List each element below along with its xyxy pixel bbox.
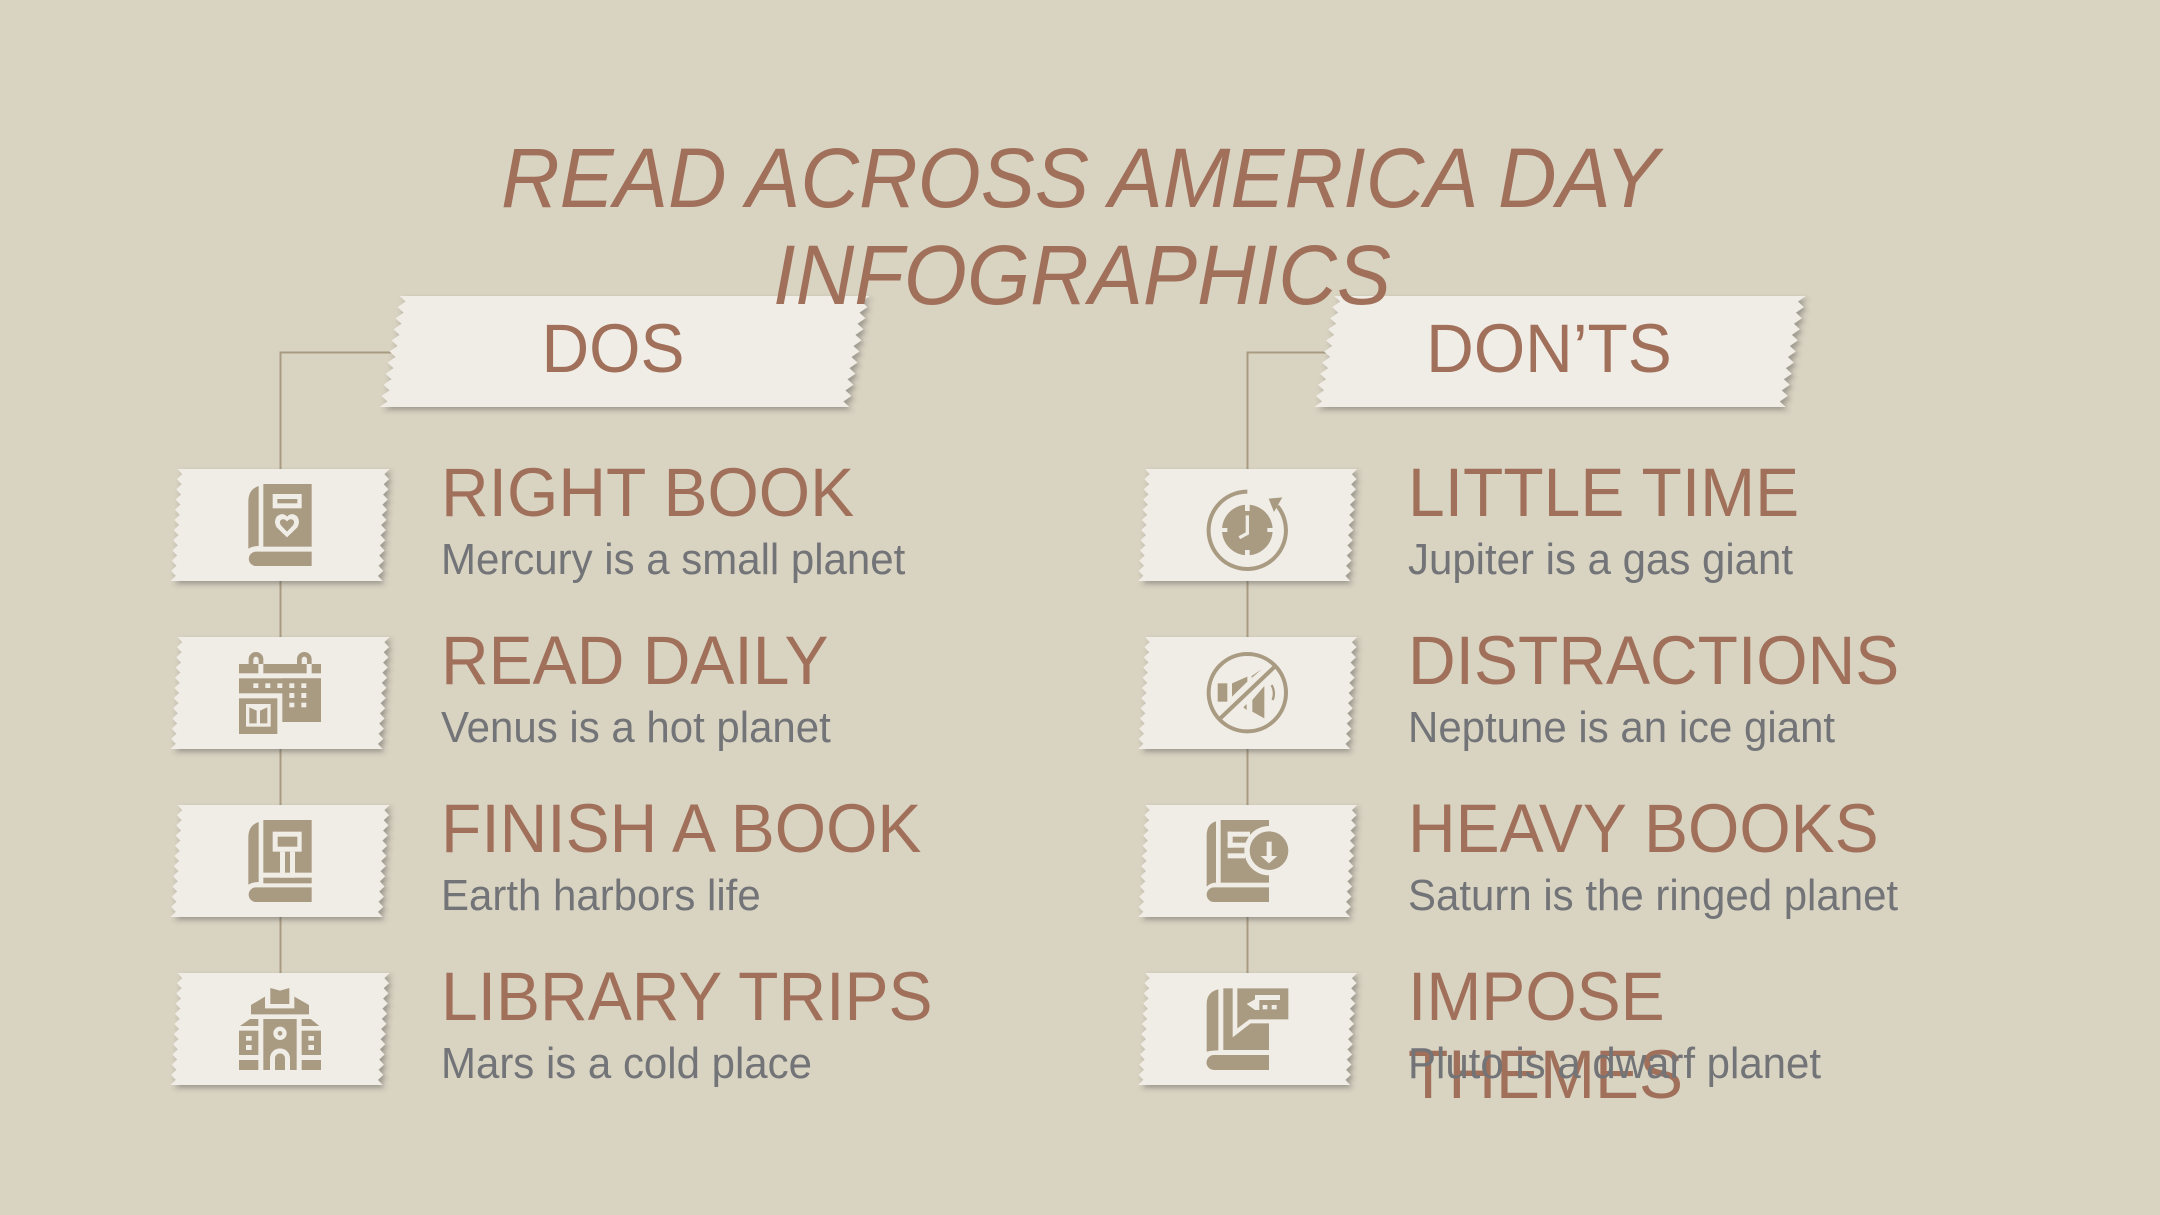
item: right book — [170, 455, 905, 584]
tape: don'ts — [1314, 296, 1806, 407]
item title: FINISH A BOOK — [441, 791, 922, 867]
icon: muted speaker — [1209, 654, 1286, 731]
item title: DISTRACTIONS — [1408, 623, 1899, 699]
tile — [1138, 805, 1357, 917]
panel: dos header — [380, 296, 869, 407]
item description: Pluto is a dwarf planet — [1408, 1039, 1821, 1088]
tile — [170, 469, 390, 581]
item title: HEAVY BOOKS — [1408, 791, 1879, 867]
connector: dos column — [280, 352, 400, 1000]
item description: Jupiter is a gas giant — [1408, 535, 1793, 584]
title — [501, 131, 1665, 322]
item description: Venus is a hot planet — [441, 703, 831, 752]
title: READ ACROSS AMERICA DAY — [501, 131, 1665, 225]
tile — [170, 973, 390, 1085]
heading: don'ts: DON’TS — [1426, 311, 1672, 387]
icon: book with bookmark stand — [248, 820, 312, 902]
tile — [1138, 973, 1357, 1085]
tape: dos — [380, 296, 869, 407]
item title: LITTLE TIME — [1408, 455, 1799, 531]
icon: calendar with book — [239, 652, 321, 734]
tile — [1138, 637, 1357, 749]
title: INFOGRAPHICS — [773, 228, 1391, 322]
item description: Neptune is an ice giant — [1408, 703, 1835, 752]
heading: dos: DOS — [541, 311, 685, 387]
icon: book with speech bubble — [1206, 987, 1290, 1070]
icon: book with download badge — [1207, 820, 1294, 902]
item title — [1408, 959, 1683, 1113]
item: little time — [1138, 455, 1799, 584]
item description: Earth harbors life — [441, 871, 761, 920]
item: finish a book — [170, 791, 922, 920]
panel: don'ts header — [1314, 296, 1806, 407]
tile — [170, 805, 390, 917]
connector: don'ts column — [1248, 352, 1335, 1000]
item: library trips — [170, 959, 933, 1088]
tile — [1138, 469, 1357, 581]
item title: READ DAILY — [441, 623, 829, 699]
item: impose themes — [1138, 959, 1821, 1113]
item title: LIBRARY TRIPS — [441, 959, 933, 1035]
item description: Mercury is a small planet — [441, 535, 905, 584]
item description: Mars is a cold place — [441, 1039, 812, 1088]
item title: THEMES — [1408, 1037, 1683, 1113]
item: distractions — [1138, 623, 1899, 752]
item: read daily — [170, 623, 831, 752]
item title: RIGHT BOOK — [441, 455, 854, 531]
item title: IMPOSE — [1408, 959, 1665, 1035]
item: heavy books — [1138, 791, 1898, 920]
tile — [170, 637, 390, 749]
icon: book with heart — [248, 484, 312, 566]
icon: clock with arrow — [1209, 492, 1286, 569]
item description: Saturn is the ringed planet — [1408, 871, 1898, 920]
icon: library building — [239, 988, 321, 1070]
